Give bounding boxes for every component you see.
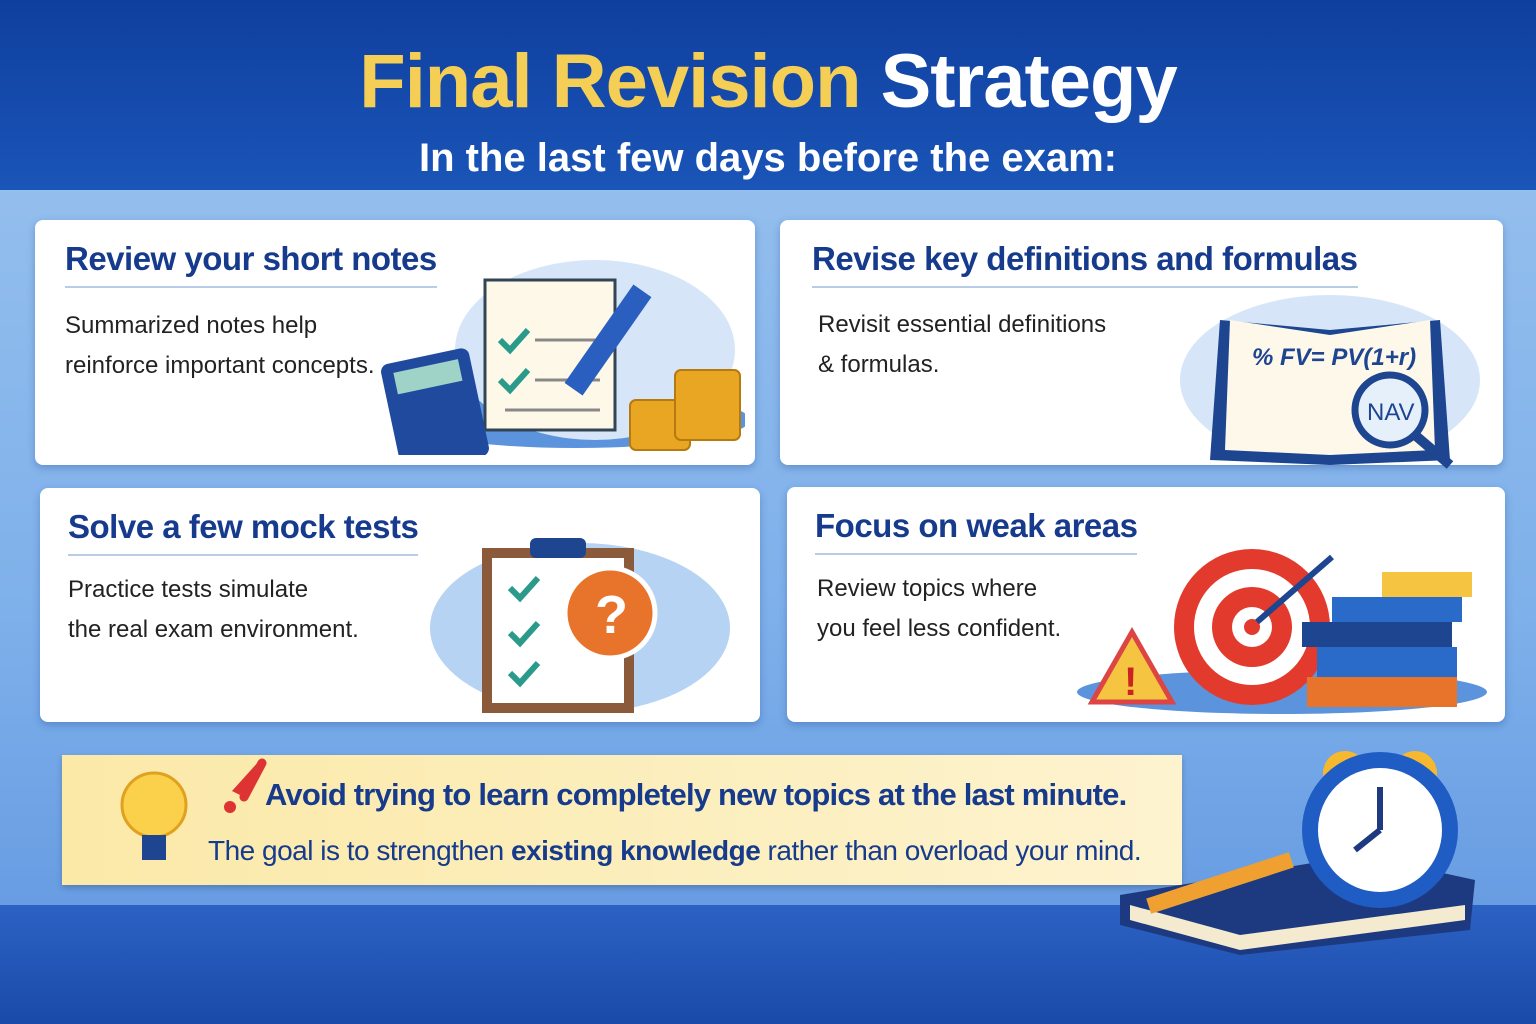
card: short notes: Summarized notes help (65, 312, 317, 339)
icon: open book with NAV magnifier (1180, 295, 1480, 469)
card: short notes (35, 220, 755, 465)
callout heading: Avoid trying to learn completely new topics at the last minute. (265, 777, 1126, 812)
card: weak areas: Focus on weak areas (815, 507, 1137, 544)
card: definitions: Revise key definitions and formulas (812, 240, 1358, 277)
callout: avoid new topics (62, 755, 1182, 885)
card: definitions: & formulas. (818, 351, 939, 378)
card: mock tests: the real exam environment. (68, 616, 359, 643)
card: weak areas: Review topics where (817, 575, 1037, 602)
card: weak areas (787, 487, 1505, 722)
card: definitions (780, 220, 1503, 465)
icon: light bulb and exclamation (120, 758, 266, 860)
icon: clipboard with question (430, 538, 730, 713)
icon: open book with NAV magnifier: % FV= PV(1+r) (1252, 344, 1416, 371)
title: Final Revision Strategy (359, 39, 1177, 124)
icon: calculator notebook coins (381, 260, 745, 455)
card: definitions: Revisit essential definitions (818, 311, 1106, 338)
card: mock tests: Practice tests simulate (68, 576, 308, 603)
icon: alarm clock on book (1120, 751, 1475, 955)
card: weak areas: you feel less confident. (817, 615, 1061, 642)
subtitle: In the last few days before the exam: (419, 136, 1117, 180)
callout text: The goal is to strengthen existing knowledge rather than overload your mind. (208, 835, 1141, 866)
icon: clipboard with question: ? (595, 585, 628, 645)
icon: target, warning, books: ! (1124, 660, 1137, 704)
icon: target, warning, books (1077, 549, 1487, 714)
card: short notes: Review your short notes (65, 240, 437, 277)
card: short notes: reinforce important concepts. (65, 352, 374, 379)
bottom band (0, 905, 1536, 1024)
card: mock tests (40, 488, 760, 722)
card: mock tests: Solve a few mock tests (68, 508, 418, 545)
header band (0, 0, 1536, 190)
icon: open book with NAV magnifier: NAV (1367, 399, 1415, 426)
